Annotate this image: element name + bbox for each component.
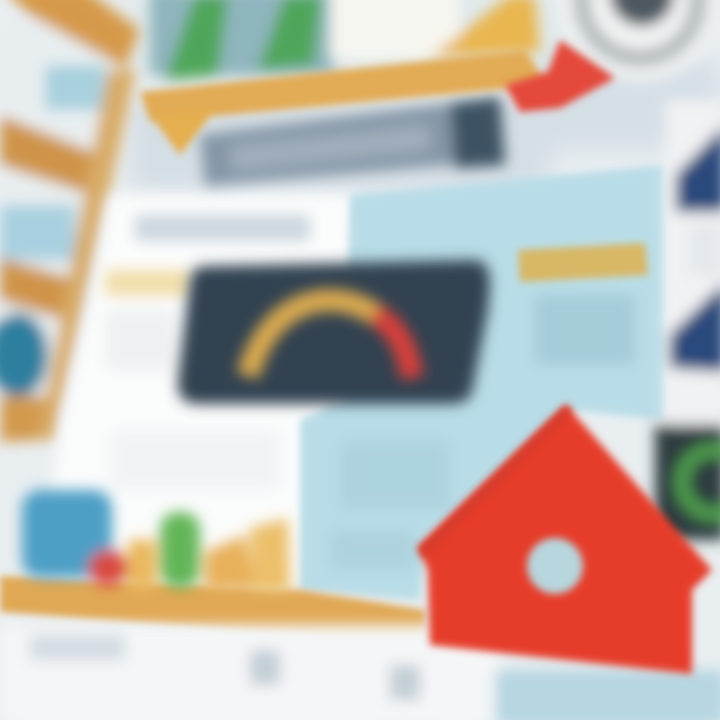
red item <box>88 550 128 586</box>
orange bar <box>128 540 156 590</box>
panel: white content area <box>40 195 355 590</box>
panel: right stripes <box>655 100 720 540</box>
panel: top backdrop <box>130 0 720 190</box>
banner: top heading <box>200 97 505 186</box>
icon: top right ring <box>558 0 720 82</box>
green bar <box>160 512 200 588</box>
text block: right panel placeholder lines <box>330 295 635 570</box>
icon: red house <box>418 405 712 674</box>
icon: red arrow <box>505 40 615 112</box>
house roof shading <box>418 405 572 558</box>
label: yellow heading <box>518 243 648 282</box>
shelf: bottom <box>0 576 425 648</box>
panel: top books <box>150 0 540 80</box>
orange bars <box>205 535 255 590</box>
card: gauge <box>178 260 490 404</box>
house body <box>418 405 712 674</box>
text block: left panel placeholder lines <box>105 215 310 490</box>
house window <box>527 538 583 594</box>
panel: light blue content area <box>300 165 665 600</box>
shelf: top <box>140 50 548 155</box>
gauge arc <box>248 300 412 378</box>
gauge card background <box>178 260 490 404</box>
panel: bottom footer <box>0 625 720 720</box>
panel: left bookcase <box>0 0 140 442</box>
chart: items on bottom shelf <box>22 490 290 592</box>
blue cylinder <box>22 490 112 578</box>
